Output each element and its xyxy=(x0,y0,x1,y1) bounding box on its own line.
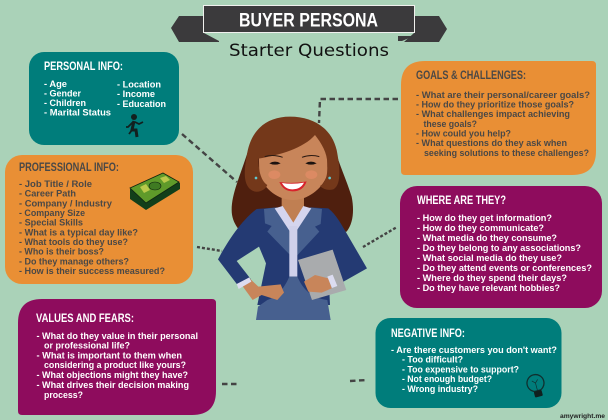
panel: professional info: PROFESSIONAL INFO: xyxy=(19,162,119,174)
panel: where are they: - Do they have relevant hobbies? xyxy=(417,282,560,293)
panel: personal info: - Location xyxy=(117,78,161,90)
tablet xyxy=(298,250,346,300)
panel: negative info: - Too expensive to support? xyxy=(402,364,519,374)
panel: where are they: - Do they belong to any associations? xyxy=(417,242,581,253)
panel: personal info: - Income xyxy=(117,88,155,99)
ears xyxy=(253,165,259,179)
right ribbon tail xyxy=(404,16,447,42)
panel: personal info: - Marital Status xyxy=(44,106,111,118)
panel: professional info: - Who is their boss? xyxy=(19,246,104,257)
holding hand xyxy=(304,275,332,293)
panel: professional info: - Company / Industry xyxy=(19,197,113,208)
panel: where are they: - Where do they spend their days? xyxy=(417,272,567,283)
panel: where are they: - Do they attend events or conferences? xyxy=(417,262,592,273)
panel: professional info: - Special Skills xyxy=(19,217,83,228)
panel: professional info: - Job Title / Role xyxy=(19,178,92,189)
panel: negative info xyxy=(376,318,562,408)
face xyxy=(258,133,327,200)
left ribbon tail xyxy=(171,16,219,42)
jacket xyxy=(218,207,367,305)
smile xyxy=(279,181,307,191)
hand on hip xyxy=(240,278,284,300)
panel: where are they: WHERE ARE THEY? xyxy=(417,195,506,207)
panel: values and fears: - What do they value in their personal xyxy=(36,330,198,341)
back hair xyxy=(232,143,353,242)
panel: goals and challenges xyxy=(401,61,596,175)
earrings xyxy=(255,177,257,179)
icon: running businessman xyxy=(126,114,143,137)
panel: professional info: - Do they manage others? xyxy=(19,255,129,266)
panel: negative info: NEGATIVE INFO: xyxy=(391,328,465,340)
panel: values and fears: or professional life? xyxy=(44,340,130,351)
blouse collar xyxy=(275,206,311,232)
panel: professional info: - Company Size xyxy=(19,207,85,218)
panel: goals and challenges: - What are their personal/career goals? xyxy=(416,89,590,100)
panel: where are they: - What social media do they use? xyxy=(417,252,562,263)
panel: goals and challenges: - How do they prioritize those goals? xyxy=(416,98,574,110)
panel: values and fears: - What is important to them when xyxy=(36,350,182,360)
skirt xyxy=(256,277,331,320)
panel: values and fears: - What objections might they have? xyxy=(36,369,188,380)
blouse placket xyxy=(289,226,297,277)
panel: professional info: - What is a typical day like? xyxy=(19,226,138,237)
panel: negative info: - Wrong industry? xyxy=(402,383,478,394)
neck xyxy=(282,190,304,223)
panel: personal info: - Age xyxy=(44,78,67,89)
title banner xyxy=(171,6,447,42)
top hair xyxy=(245,117,339,192)
eyes xyxy=(269,162,281,165)
panel: personal info: - Education xyxy=(117,98,166,109)
panel: where are they xyxy=(400,186,602,308)
panel: professional info: - Career Path xyxy=(19,188,76,199)
panel: values and fears: VALUES AND FEARS: xyxy=(36,313,134,325)
panel: goals and challenges: seeking solutions to these challenges? xyxy=(424,147,589,158)
panel: goals and challenges: - What questions do they ask when xyxy=(416,137,567,148)
panel: values and fears xyxy=(18,299,216,415)
panel: personal info xyxy=(29,52,179,145)
credit: amywright.me xyxy=(560,413,605,420)
banner bar xyxy=(204,6,414,32)
cuff right xyxy=(327,275,337,288)
panel: goals and challenges: - How could you help? xyxy=(416,128,511,138)
panel: negative info: - Are there customers you don't want? xyxy=(391,344,557,355)
panel: professional info: - How is their success measured? xyxy=(19,265,165,276)
heading: BUYER PERSONA xyxy=(239,10,378,32)
panel: professional info: - What tools do they use? xyxy=(19,236,128,247)
panel: personal info: - Gender xyxy=(44,88,81,98)
panel: values and fears: - What drives their decision making xyxy=(36,379,189,390)
illustration: businesswoman xyxy=(218,117,367,320)
jacket front panels xyxy=(264,207,292,257)
cheeks xyxy=(268,170,280,179)
panel: where are they: - How do they communicate? xyxy=(417,222,544,233)
panel: goals and challenges: these goals? xyxy=(424,118,477,129)
panel: personal info: - Children xyxy=(44,97,86,108)
panel: goals and challenges: - What challenges impact achieving xyxy=(416,108,570,119)
subtitle: Starter Questions xyxy=(229,41,389,61)
icon: light bulb xyxy=(525,373,547,399)
icon: stack of money xyxy=(130,173,180,210)
connector lines xyxy=(182,99,398,384)
panel: goals and challenges: GOALS & CHALLENGES: xyxy=(416,70,526,82)
eyebrows xyxy=(265,155,319,157)
panel: negative info: - Too difficult? xyxy=(402,354,463,365)
panel: where are they: - How do they get information? xyxy=(417,212,552,223)
panel: values and fears: considering a product like yours? xyxy=(44,359,186,370)
panel: negative info: - Not enough budget? xyxy=(402,373,492,384)
panel: values and fears: process? xyxy=(44,389,83,400)
panel: professional info xyxy=(5,155,193,284)
panel: where are they: - What media do they consume? xyxy=(417,232,557,243)
cuff xyxy=(237,277,251,289)
panel: personal info: PERSONAL INFO: xyxy=(44,61,123,73)
